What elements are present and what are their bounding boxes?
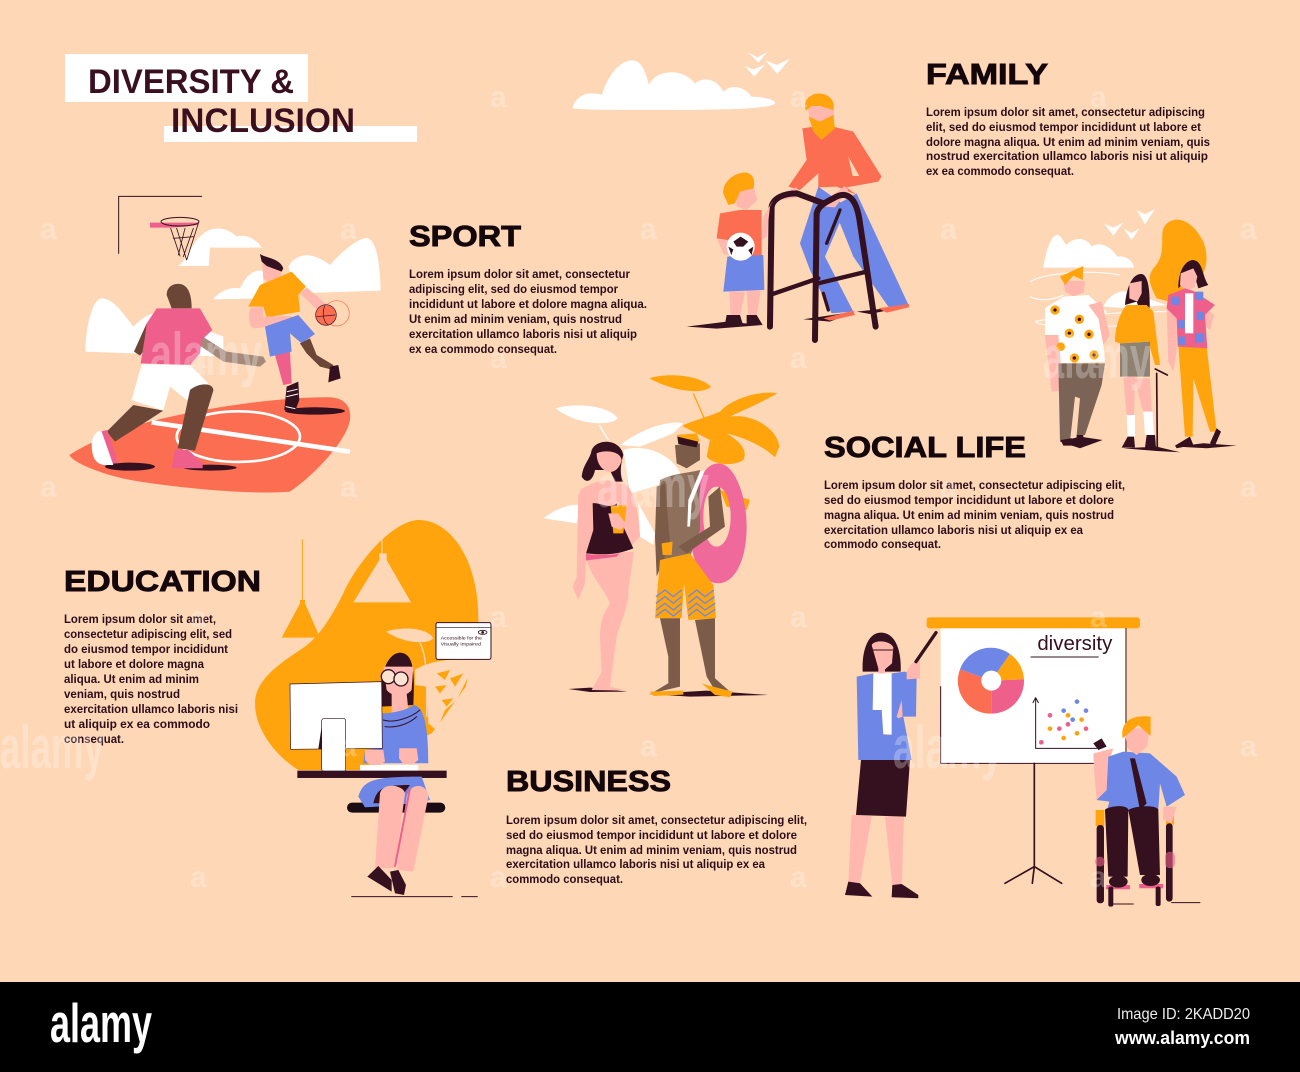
stock watermark (0, 81, 1257, 894)
stock watermark: a (340, 730, 357, 763)
flipchart board: diversity (1037, 633, 1112, 655)
stock watermark: a (1090, 861, 1107, 894)
illustration: presentation (845, 617, 1200, 907)
text block: education: ut aliquip ex ea commodo (64, 717, 210, 731)
stock watermark: a (40, 213, 57, 246)
stock watermark: alamy (1043, 324, 1151, 391)
text block: education: ut labore et dolore magna (64, 657, 204, 671)
callout: accessibility window (436, 623, 491, 659)
stock watermark: a (940, 213, 957, 246)
stock watermark: a (1240, 213, 1257, 246)
man in wheelchair (1093, 716, 1200, 907)
panel: business (506, 617, 1200, 907)
text block: business (506, 813, 807, 886)
illustration: three friends (1030, 209, 1237, 452)
text block: family (926, 105, 1210, 178)
text block: business: sed do eiusmod tempor incididunt ut labore et dolore (506, 828, 797, 842)
stock watermark: a (640, 471, 657, 504)
text block: education: do eiusmod tempor incididunt (64, 642, 228, 656)
text block: family: nostrud exercitation ullamco laboris nisi ut aliquip (926, 149, 1208, 163)
stock watermark: a (490, 861, 507, 894)
text block: education: exercitation ullamco laboris nisi (64, 702, 238, 716)
footer bar: Image ID: 2KADD20 (1117, 1006, 1250, 1023)
text block: education: consequat. (64, 732, 124, 746)
stock watermark: a (490, 81, 507, 114)
heading: family: FAMILY (926, 59, 1048, 91)
footer bar (0, 982, 1300, 1072)
text block: sport: Lorem ipsum dolor sit amet, consectetur (409, 267, 630, 281)
text block: education: veniam, quis nostrud (64, 687, 180, 701)
stock watermark: a (340, 471, 357, 504)
stock watermark: a (190, 861, 207, 894)
text block: social life: commodo consequat. (824, 537, 941, 551)
text block: sport: adipiscing elit, sed do eiusmod tempor (409, 282, 618, 296)
stock watermark: a (940, 471, 957, 504)
stock watermark: a (490, 601, 507, 634)
text block: family: ex ea commodo consequat. (926, 164, 1074, 178)
stock watermark: a (190, 601, 207, 634)
panel: education (64, 520, 491, 897)
donut chart (958, 648, 1024, 714)
text block: social life: exercitation ullamco laboris nisi ut aliquip ex ea (824, 523, 1083, 537)
stock watermark: a (1240, 471, 1257, 504)
text block: social life: Lorem ipsum dolor sit amet, consectetur adipiscing elit, (824, 478, 1125, 492)
stock watermark: a (1090, 81, 1107, 114)
text block: family: elit, sed do eiusmod tempor incididunt ut labore et (926, 120, 1201, 134)
stock watermark: a (790, 342, 807, 375)
title: DIVERSITY & (88, 63, 294, 101)
illustration: woman at computer (255, 520, 491, 897)
stock watermark: a (790, 601, 807, 634)
stock watermark: a (790, 81, 807, 114)
text block: social life (824, 478, 1125, 551)
text block: sport (409, 267, 647, 356)
illustration: man with walker and boy (573, 52, 909, 340)
stock watermark: alamy (893, 714, 1003, 781)
text block: sport: incididunt ut labore et dolore magna aliqua. (409, 297, 647, 311)
panel: social life (824, 209, 1237, 551)
stock watermark: a (1090, 601, 1107, 634)
panel: family (573, 52, 1210, 340)
stock watermark: a (490, 342, 507, 375)
heading: business: BUSINESS (506, 766, 671, 798)
text block: business: Lorem ipsum dolor sit amet, consectetur adipiscing elit, (506, 813, 807, 827)
text block: sport: exercitation ullamco laboris nisi ut aliquip (409, 327, 637, 341)
heading: education: EDUCATION (64, 566, 261, 598)
flipchart board (927, 617, 1140, 883)
illustration: basketball players (69, 196, 381, 493)
callout: accessibility window: Visually Impaired (441, 642, 481, 648)
text block: education (64, 612, 238, 746)
stock watermark: a (1090, 342, 1107, 375)
title: INCLUSION (171, 102, 355, 140)
stock watermark: a (1240, 730, 1257, 763)
stock watermark: alamy (0, 714, 104, 781)
text block: family: dolore magna aliqua. Ut enim ad minim veniam, quis (926, 135, 1210, 149)
callout: accessibility window: Accessible for the (441, 635, 482, 641)
text block: business: magna aliqua. Ut enim ad minim veniam, quis nostrud (506, 843, 797, 857)
text block: business: commodo consequat. (506, 872, 623, 886)
title (65, 54, 417, 142)
text block: sport: ex ea commodo consequat. (409, 342, 557, 356)
scatter plot (1033, 698, 1097, 748)
stock watermark: a (640, 213, 657, 246)
stock watermark: alamy (597, 453, 709, 520)
text block: education: Lorem ipsum dolor sit amet, (64, 612, 216, 626)
text block: social life: magna aliqua. Ut enim ad minim veniam, quis nostrud (824, 508, 1114, 522)
stock watermark: a (40, 471, 57, 504)
footer bar: alamy (50, 992, 152, 1054)
text block: education: consectetur adipiscing elit, sed (64, 627, 232, 641)
stock watermark: alamy (150, 321, 262, 388)
text block: family: Lorem ipsum dolor sit amet, consectetur adipiscing (926, 105, 1205, 119)
text block: social life: sed do eiusmod tempor incididunt ut labore et dolore (824, 493, 1114, 507)
stock watermark: a (340, 213, 357, 246)
stock watermark: a (640, 730, 657, 763)
text block: education: aliqua. Ut enim ad minim (64, 672, 199, 686)
panel: beach couple (543, 375, 779, 697)
text block: sport: Ut enim ad minim veniam, quis nostrud (409, 312, 622, 326)
illustration: couple with swim ring and palm leaves (543, 375, 779, 697)
text block: business: exercitation ullamco laboris nisi ut aliquip ex ea (506, 857, 765, 871)
stock watermark: a (940, 730, 957, 763)
stock watermark: a (190, 342, 207, 375)
stock watermark: a (790, 861, 807, 894)
heading: sport: SPORT (409, 221, 521, 253)
heading: social life: SOCIAL LIFE (824, 432, 1026, 464)
footer bar: www.alamy.com (1114, 1028, 1250, 1048)
presenter woman (845, 633, 936, 898)
panel: sport (69, 196, 647, 493)
